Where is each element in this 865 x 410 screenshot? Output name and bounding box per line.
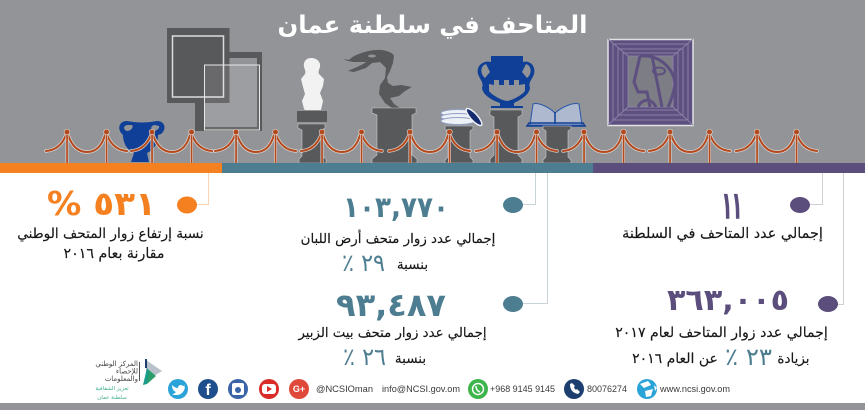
icon: small blue vase [119, 121, 164, 162]
title: المتاحف في سلطنة عمان [278, 10, 587, 39]
stat panel: Land of Frankincense museum: ١٠٣,٧٧٠ [343, 190, 449, 224]
logo: NCSI: المركز الوطني [95, 360, 138, 368]
stat panel: Bait Al Zubair museum: بنسبة [395, 351, 426, 367]
icon: whatsapp [468, 379, 488, 399]
icon: purple framed portrait [608, 39, 693, 126]
stat panel: Land of Frankincense museum [301, 173, 536, 277]
logo: NCSI: تعزيز الشفافية [95, 386, 129, 392]
website address: www.ncsi.gov.om [659, 384, 730, 395]
icon: youtube [259, 379, 279, 399]
email address: info@NCSI.gov.om [382, 384, 460, 395]
stat panel: national museum visitor rise [17, 173, 208, 262]
icon: phone [564, 379, 584, 399]
icon: overlapping dark frames [167, 28, 262, 131]
stat panel: Land of Frankincense museum: إجمالي عدد زوار متحف أرض اللبان [301, 229, 495, 247]
social handle: @NCSIOman [316, 384, 373, 395]
icon: website globe [637, 379, 657, 399]
stat panel: total visitors 2017: ٣٦٣,٠٠٥ [667, 283, 789, 318]
icon: bangles on pedestal [441, 106, 484, 163]
logo: NCSI: والمعلومات [105, 375, 138, 383]
stat panel: Bait Al Zubair museum [297, 173, 548, 371]
stat panel: Bait Al Zubair museum: إجمالي عدد زوار متحف بيت الزبير [297, 326, 487, 341]
logo: NCSI [95, 359, 162, 401]
stat panel: Land of Frankincense museum: ٪ ٢٩ [342, 249, 385, 277]
phone number: 80076274 [587, 384, 627, 395]
logo: NCSI: سلطنة عمان [97, 395, 127, 401]
icon: dinosaur fossil on pedestal [344, 50, 417, 163]
stat panel: total visitors 2017: عن العام ٢٠١٦ [632, 351, 718, 367]
stat panel: total visitors 2017: بزيادة [777, 351, 810, 367]
icon: twitter [168, 379, 188, 399]
stat panel: total visitors 2017 [615, 173, 844, 371]
icon: facebook [198, 379, 218, 399]
teal section bar [222, 163, 593, 173]
stat panel: total visitors 2017: ٪ ٢٣ [725, 343, 772, 371]
icon: google plus: G+ [293, 384, 305, 394]
whatsapp number: +968 9145 9145 [490, 384, 555, 395]
velvet rope barriers [46, 129, 817, 163]
icon: instagram [228, 379, 248, 399]
stat panel: total museums: إجمالي عدد المتاحف في السلطنة [622, 226, 823, 242]
stat panel: total museums [622, 173, 823, 242]
icon: google plus [289, 379, 309, 399]
gallery background panel [0, 0, 865, 163]
purple section bar [593, 163, 865, 173]
stat panel: national museum visitor rise: % ٥٣١ [47, 184, 156, 223]
icon: open book on pedestal [527, 104, 585, 163]
stat panel: total museums: ١١ [722, 184, 742, 227]
orange section bar [0, 163, 222, 173]
stat panel: Bait Al Zubair museum: ٪ ٢٦ [343, 343, 386, 371]
icon: white statue on pedestal [297, 58, 327, 163]
stat panel: national museum visitor rise: مقارنة بعام ٢٠١٦ [64, 246, 164, 262]
stat panel: Bait Al Zubair museum: ٩٣,٤٨٧ [336, 286, 446, 324]
stat panel: Land of Frankincense museum: بنسبة [397, 257, 428, 273]
logo: NCSI: للإحصاء [116, 368, 138, 376]
stat panel: total visitors 2017: إجمالي عدد زوار المتاحف لعام ٢٠١٧ [615, 325, 828, 341]
icon: facebook: f [205, 382, 211, 399]
icon: large blue vase on pedestal [478, 56, 534, 163]
bottom grey strip [0, 403, 865, 410]
stat panel: national museum visitor rise: نسبة إرتفاع زوار المتحف الوطني [17, 226, 204, 242]
